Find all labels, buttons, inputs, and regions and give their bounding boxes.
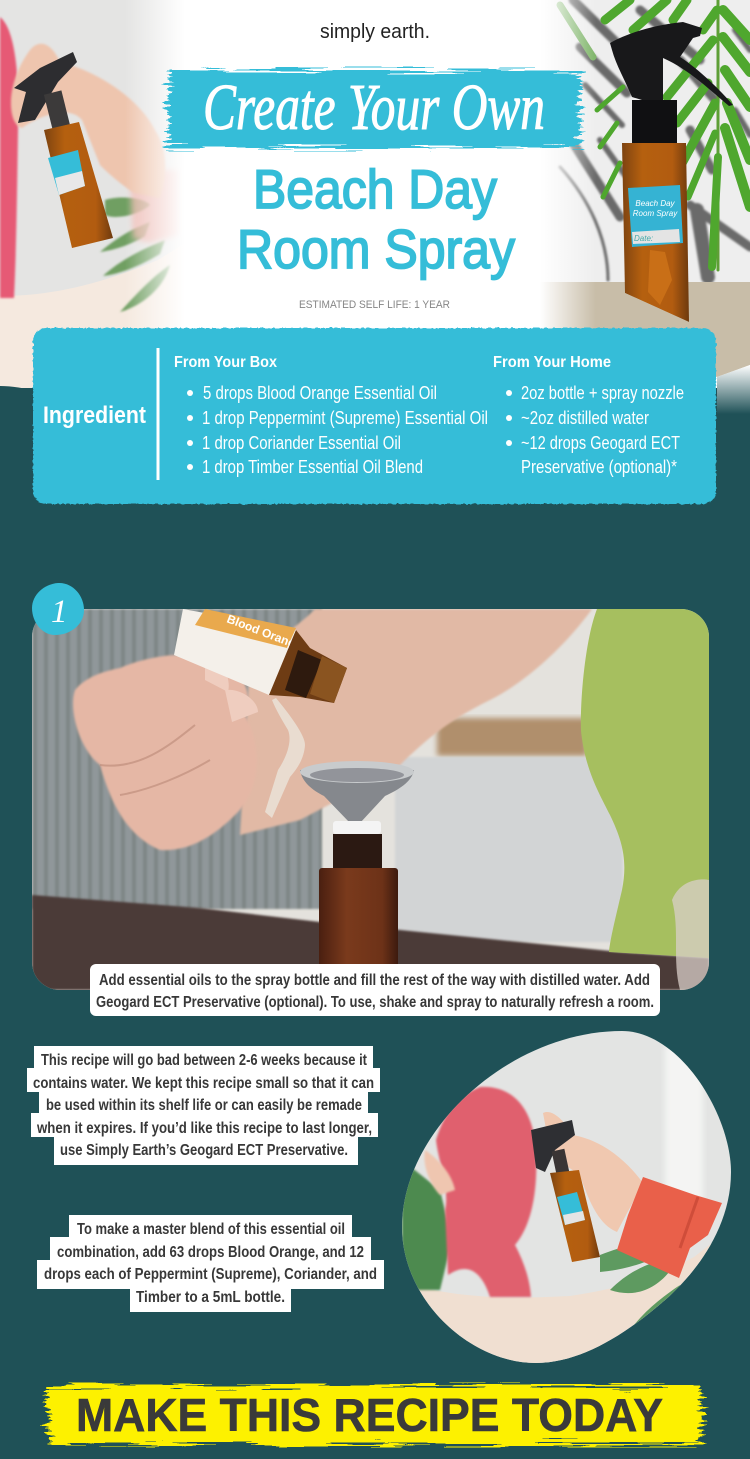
list: from your box xyxy=(174,354,488,477)
list: from your box: 1 drop Timber Essential Oil Blend xyxy=(202,457,423,477)
step number badge xyxy=(32,583,84,635)
photo: bottle on sand with palm xyxy=(540,0,750,414)
list: from your box: 5 drops Blood Orange Essential Oil xyxy=(203,383,437,403)
palm leaflets xyxy=(560,0,750,270)
text block: master blend: drops each of Peppermint (Supreme), Coriander, and xyxy=(44,1266,377,1283)
divider xyxy=(156,348,160,480)
text block: shelf life warning: This recipe will go bad between 2-6 weeks because it xyxy=(41,1052,368,1069)
list: from your home: ~2oz distilled water xyxy=(521,408,649,428)
header section xyxy=(0,0,750,420)
logo: simply earth. xyxy=(320,21,430,43)
text block: master blend: combination, add 63 drops Blood Orange, and 12 xyxy=(57,1244,364,1261)
photo: hand spraying bottle xyxy=(0,0,195,388)
list: from your box: From Your Box xyxy=(174,354,277,371)
cta text: MAKE THIS RECIPE TODAY xyxy=(76,1389,663,1441)
bottle with label xyxy=(610,22,733,322)
list: from your home: Preservative (optional)* xyxy=(521,457,677,477)
shelf life note: ESTIMATED SELF LIFE: 1 YEAR xyxy=(299,299,450,311)
list: from your home: From Your Home xyxy=(493,354,611,371)
text block: shelf life warning: be used within its shelf life or can easily be remade xyxy=(46,1097,362,1114)
funnel xyxy=(300,761,414,823)
title: Beach Day Room Spray: Beach Day xyxy=(253,158,497,220)
step number badge: 1 xyxy=(51,594,68,630)
left bowl rim xyxy=(0,386,21,388)
list: from your home: 2oz bottle + spray nozzle xyxy=(521,383,684,403)
list: from your home: ~12 drops Geogard ECT xyxy=(521,433,680,453)
text block: shelf life warning: when it expires. If you’d like this recipe to last longer, xyxy=(36,1120,372,1137)
caption: step 1 instructions xyxy=(90,964,660,1016)
title: Beach Day Room Spray xyxy=(237,158,515,280)
photo: step 1 pouring oil xyxy=(32,609,709,990)
ingredient heading: Ingredient xyxy=(43,402,146,429)
text block: master blend: Timber to a 5mL bottle. xyxy=(136,1289,285,1306)
call to action banner xyxy=(48,1385,702,1445)
script heading: Create Your Own xyxy=(203,71,545,144)
caption: step 1 instructions: Add essential oils to the spray bottle and fill the rest of the way with distilled water. Add xyxy=(99,972,650,989)
text block: shelf life warning xyxy=(27,1046,380,1165)
brush banner: Create Your Own xyxy=(168,70,580,148)
oil bottle xyxy=(174,609,347,703)
text block: master blend xyxy=(37,1215,384,1312)
panel: ingredients xyxy=(33,328,716,504)
text block: master blend: To make a master blend of this essential oil xyxy=(77,1221,345,1238)
bottle with label: Beach Day xyxy=(635,199,676,208)
list: from your home xyxy=(493,354,684,477)
bracelet xyxy=(265,698,305,818)
list: from your box: 1 drop Coriander Essential Oil xyxy=(202,433,401,453)
palm shadows xyxy=(560,0,750,280)
bottle with label: Date: xyxy=(634,234,653,243)
list: from your box: 1 drop Peppermint (Supreme) Essential Oil xyxy=(202,408,488,428)
text block: shelf life warning: use Simply Earth’s Geogard ECT Preservative. xyxy=(60,1142,348,1159)
photo: spraying into mirror xyxy=(400,1030,735,1365)
text block: shelf life warning: contains water. We kept this recipe small so that it can xyxy=(33,1075,374,1092)
title: Beach Day Room Spray: Room Spray xyxy=(237,218,515,280)
oil bottle: Blood Orange xyxy=(225,612,304,653)
bottle with label: Room Spray xyxy=(633,209,678,218)
